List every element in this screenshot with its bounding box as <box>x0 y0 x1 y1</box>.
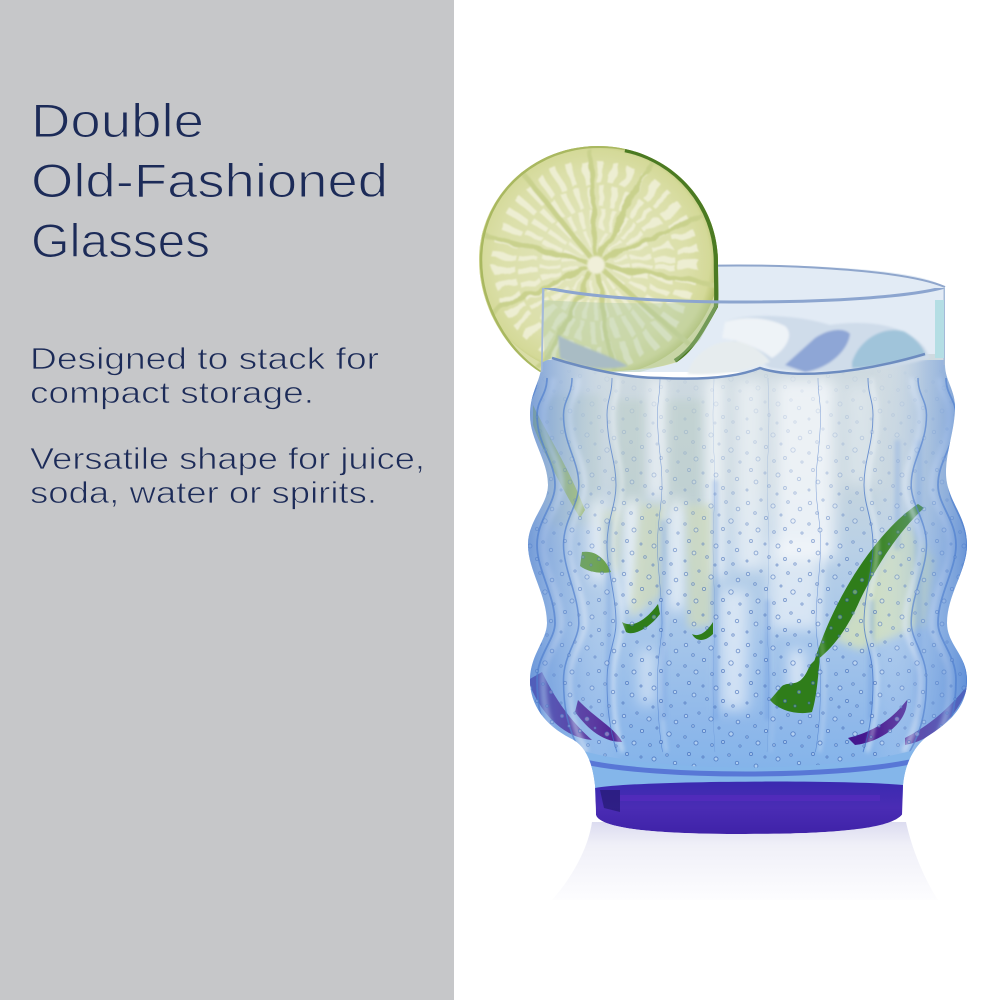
ice cubes <box>558 316 930 374</box>
lime peel pieces <box>533 405 924 713</box>
lime slice garnish <box>475 140 725 380</box>
text block: stacking <box>30 341 379 410</box>
glass reflection <box>552 822 938 900</box>
waterline <box>552 354 925 379</box>
purple shadows at the base <box>528 672 970 745</box>
glass foot <box>595 782 903 834</box>
title: Old-Fashioned <box>31 154 388 207</box>
side shading <box>525 360 970 780</box>
glass wall tint over lime <box>543 300 720 372</box>
text block: stacking: compact storage. <box>30 375 314 410</box>
rib contours <box>527 378 967 752</box>
glass front rim <box>540 288 945 372</box>
text block: stacking: Designed to stack for <box>30 341 379 376</box>
text block: versatility <box>30 441 425 510</box>
title: Glasses <box>31 214 210 267</box>
foot collar <box>585 750 914 799</box>
light refraction columns <box>590 378 875 710</box>
text block: versatility: Versatile shape for juice, <box>30 441 425 476</box>
grey-green panels in the upper liquid <box>560 398 701 521</box>
title <box>31 94 388 267</box>
carbonation bubbles <box>520 370 980 780</box>
blue streaks <box>606 440 922 720</box>
drinking glass <box>520 270 980 834</box>
title: Double <box>31 94 204 147</box>
pale lime flesh seen through glass <box>602 505 935 650</box>
text block: versatility: soda, water or spirits. <box>30 475 377 510</box>
liquid body <box>520 270 980 834</box>
rib highlights <box>543 378 950 752</box>
panel: grey text background <box>0 0 454 1000</box>
glass back wall and rim <box>541 265 945 372</box>
